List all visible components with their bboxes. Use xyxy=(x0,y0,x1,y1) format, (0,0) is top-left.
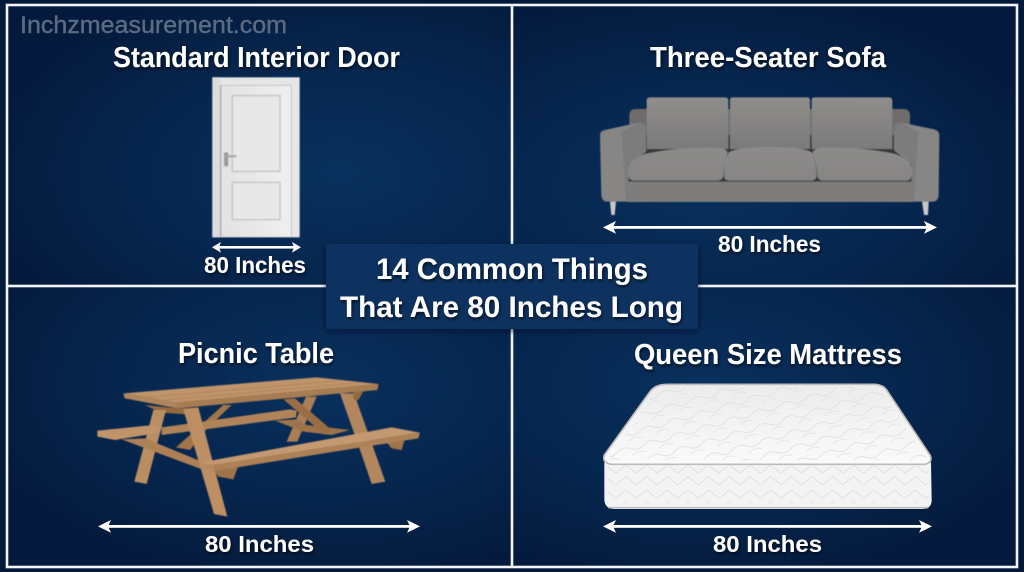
title line 2: That Are 80 Inches Long xyxy=(340,291,683,324)
arrow: sofa width xyxy=(603,221,937,234)
heading: queen size mattress: Queen Size Mattress xyxy=(634,339,902,371)
rear bench xyxy=(162,409,297,435)
panel: standard interior door xyxy=(7,5,512,286)
panel: queen size mattress xyxy=(512,286,1017,567)
icon: white door xyxy=(212,77,300,237)
label: door 80 inches: 80 Inches xyxy=(204,252,306,278)
title line 1: 14 Common Things xyxy=(376,253,648,286)
label: sofa 80 inches: 80 Inches xyxy=(718,231,821,257)
label: table 80 inches: 80 Inches xyxy=(205,531,314,557)
arrow: mattress width xyxy=(603,520,932,533)
arrow: table width xyxy=(98,520,420,533)
icon: grey sofa xyxy=(600,97,939,215)
center title box xyxy=(326,244,698,329)
tabletop xyxy=(123,377,379,403)
front left leg xyxy=(134,410,166,484)
arrow: door width xyxy=(212,242,301,253)
rear legs and braces xyxy=(340,393,385,484)
label: mattress 80 inches: 80 Inches xyxy=(713,531,822,557)
watermark: Inchzmeasurement.com xyxy=(20,12,287,39)
panel: picnic table xyxy=(7,286,512,567)
heading: standard interior door: Standard Interior Door xyxy=(113,42,400,74)
heading: three-seater sofa: Three-Seater Sofa xyxy=(650,42,887,74)
panel: three-seater sofa xyxy=(512,5,1017,286)
front bench xyxy=(238,441,400,467)
heading: picnic table: Picnic Table xyxy=(178,338,334,370)
icon: wooden picnic table xyxy=(97,377,420,517)
front bench supports xyxy=(213,466,238,479)
icon: white mattress xyxy=(604,384,932,509)
